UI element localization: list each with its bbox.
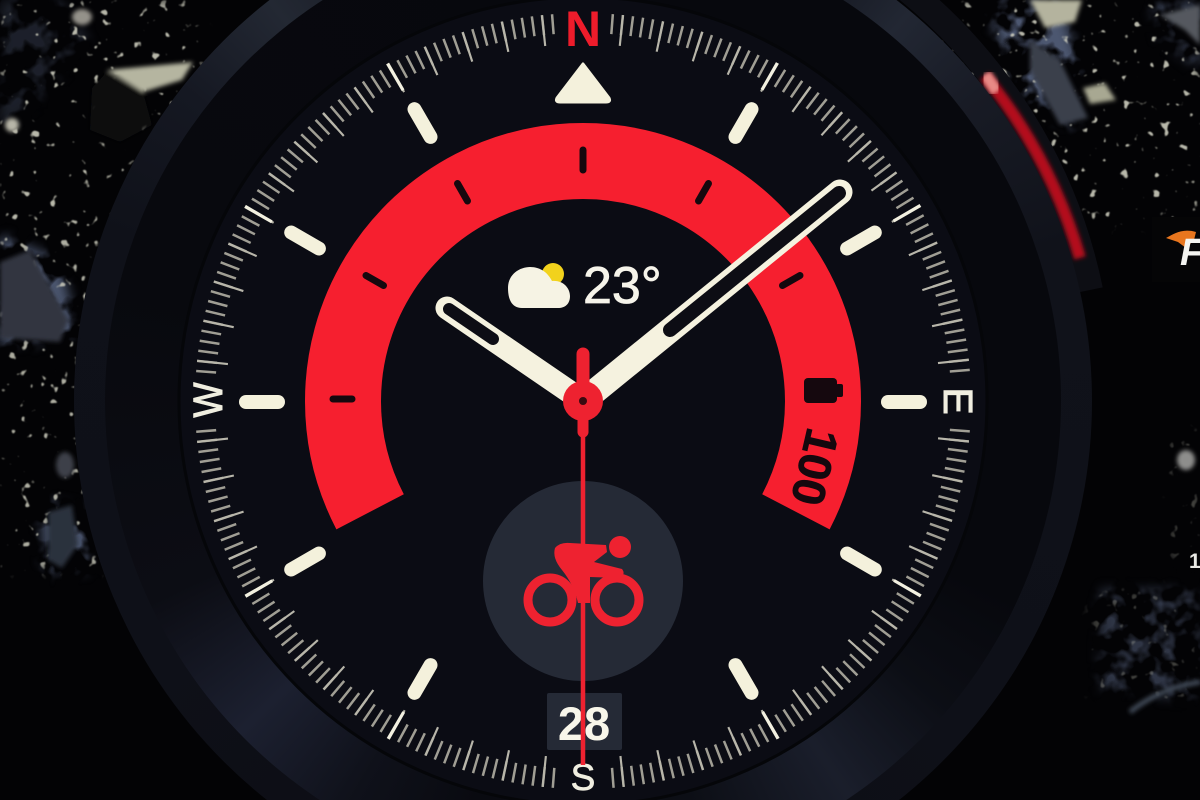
red second hand and hub	[563, 354, 603, 765]
gauge tick marks	[333, 150, 800, 399]
watch bezel inner ring	[105, 0, 1061, 800]
date window	[547, 693, 622, 750]
compass tick ring	[185, 4, 981, 794]
compass letter W: W	[185, 382, 231, 418]
dial face	[179, 0, 987, 800]
icon: sun behind cloud	[508, 263, 570, 308]
activity complication	[483, 481, 683, 681]
minute hand	[583, 192, 840, 401]
icon: cyclist	[528, 536, 639, 622]
compass letter N: N	[565, 1, 601, 57]
temperature: 23°	[583, 257, 662, 315]
compass letter E: E	[935, 387, 981, 415]
north triangle marker	[556, 64, 610, 102]
compass letter S: S	[571, 757, 595, 798]
red battery gauge arc	[343, 161, 823, 512]
battery level: 100	[781, 424, 849, 510]
outer case band with red crown accent	[861, 0, 1090, 290]
hour hand	[447, 308, 583, 401]
logo badge	[1152, 217, 1200, 282]
date window: 28	[558, 697, 610, 750]
icon: battery	[804, 378, 843, 403]
hour markers	[246, 109, 920, 693]
